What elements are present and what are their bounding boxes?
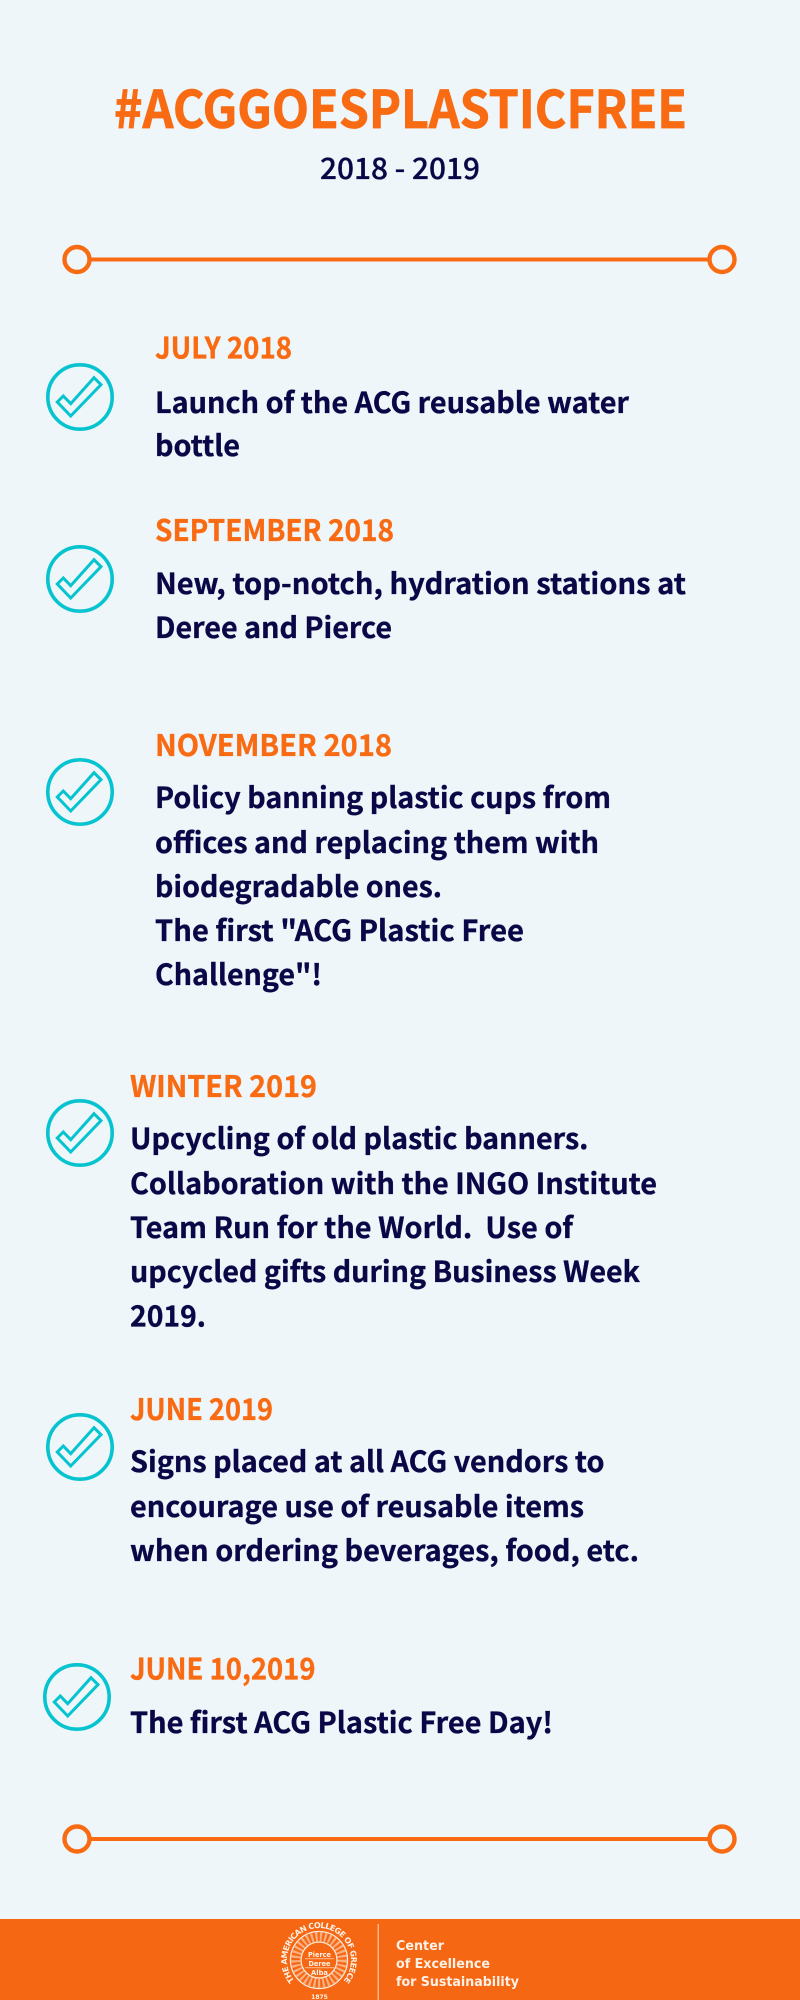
description: bottle — [155, 423, 240, 465]
date heading: JUNE 10,2019 — [130, 1644, 316, 1688]
description — [130, 1116, 657, 1336]
icon: check circle — [45, 1665, 109, 1729]
title: #ACGGOESPLASTICFREE — [114, 68, 687, 143]
icon: check circle — [48, 1101, 112, 1165]
description: The first ACG Plastic Free Day! — [130, 1700, 553, 1742]
subtitle: years: 2018 - 2019 — [320, 146, 480, 188]
entry: September 2018 — [48, 506, 686, 647]
description — [155, 775, 611, 994]
description: encourage use of reusable items — [130, 1484, 584, 1526]
description: Policy banning plastic cups from — [155, 775, 611, 817]
description: New, top-notch, hydration stations at — [155, 561, 686, 603]
date heading: JULY 2018 — [155, 324, 292, 368]
description: The first "ACG Plastic Free — [155, 908, 524, 950]
footer band — [0, 1919, 800, 2000]
logo: college seal: THE AMERICAN COLLEGE OF GREECE — [281, 1922, 357, 1984]
description — [130, 1439, 639, 1570]
date heading: WINTER 2019 — [130, 1062, 317, 1106]
footer label: Center of Excellence for Sustainability: for Sustainability — [396, 1974, 519, 1990]
icon: check circle — [48, 365, 112, 429]
description: biodegradable ones. — [155, 864, 442, 906]
description: 2019. — [130, 1294, 206, 1336]
description: Signs placed at all ACG vendors to — [130, 1439, 604, 1481]
logo divider — [378, 1924, 379, 2000]
bottom divider with end circles — [64, 1826, 734, 1852]
entry: November 2018 — [48, 721, 611, 994]
description: Upcycling of old plastic banners. — [130, 1116, 588, 1158]
description: Challenge"! — [155, 952, 322, 994]
icon: check circle — [48, 760, 112, 824]
logo: college seal: Pierce — [308, 1951, 331, 1959]
top divider with end circles — [64, 247, 734, 272]
logo: college seal: Deree — [308, 1960, 331, 1968]
date heading: SEPTEMBER 2018 — [155, 506, 394, 550]
description: upcycled gifts during Business Week — [130, 1249, 640, 1291]
description: offices and replacing them with — [155, 820, 599, 862]
entry: Winter 2019 — [48, 1062, 657, 1336]
description — [155, 380, 629, 465]
date heading: NOVEMBER 2018 — [155, 721, 392, 765]
description: Deree and Pierce — [155, 605, 392, 647]
footer label: Center of Excellence for Sustainability: Center — [396, 1938, 444, 1954]
description: Collaboration with the INGO Institute — [130, 1161, 657, 1203]
footer label: Center of Excellence for Sustainability — [396, 1938, 519, 1990]
description — [155, 561, 686, 647]
description: when ordering beverages, food, etc. — [130, 1528, 639, 1570]
entry: July 2018 — [48, 324, 629, 465]
icon: check circle — [48, 547, 112, 611]
footer label: Center of Excellence for Sustainability: of Excellence — [396, 1956, 490, 1972]
entry: June 10, 2019 — [45, 1644, 553, 1742]
icon: check circle — [48, 1415, 112, 1479]
description: Team Run for the World. Use of — [130, 1205, 574, 1247]
date heading: JUNE 2019 — [130, 1385, 273, 1429]
entry: June 2019 — [48, 1385, 639, 1570]
logo: college seal: Alba — [311, 1969, 328, 1977]
description: Launch of the ACG reusable water — [155, 380, 629, 422]
